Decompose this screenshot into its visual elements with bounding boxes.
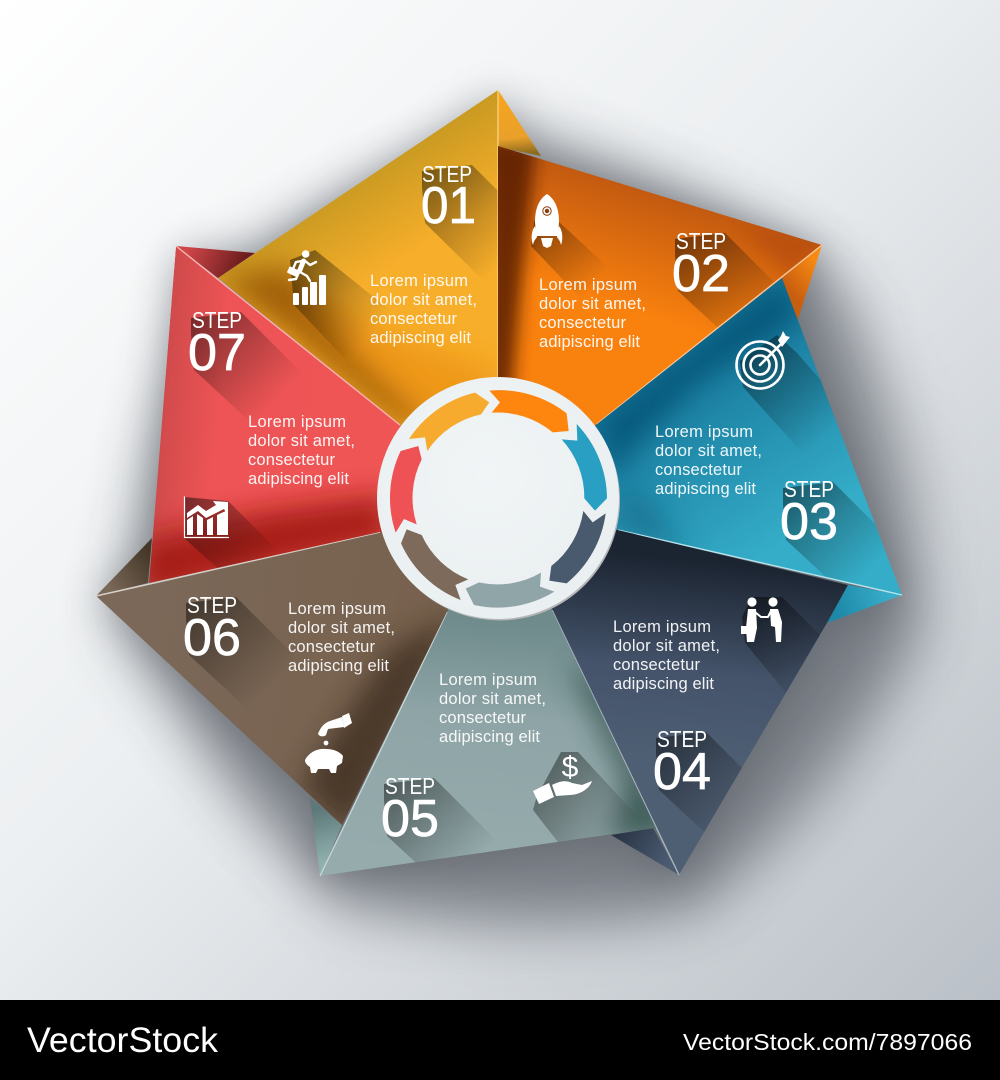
panel 05 fill	[322, 609, 656, 876]
icon: hand with dollar: $	[562, 751, 579, 784]
step 02 text: Lorem ipsum	[539, 276, 637, 294]
step 03 label: 03	[780, 493, 838, 551]
panel 06 edge	[96, 532, 380, 596]
icon: handshake	[741, 597, 782, 642]
panel: step 06	[96, 532, 448, 825]
step 05 text: Lorem ipsum	[439, 671, 537, 689]
folded flaps behind panels	[96, 90, 902, 876]
panel 03 edge	[618, 530, 902, 595]
footer logo: VectorStock	[27, 1021, 219, 1060]
step 01 label: STEP	[422, 161, 472, 187]
panel 01 edge	[497, 90, 499, 378]
step 02 label: STEP	[676, 228, 726, 254]
panel 07 fill	[149, 246, 401, 583]
step 04 text: consectetur	[613, 656, 700, 674]
step 06 text: dolor sit amet,	[288, 619, 395, 637]
step 06 label: 06	[183, 609, 241, 667]
step 02 text	[539, 276, 646, 351]
panel 02 edge	[597, 245, 822, 424]
step 07 text: consectetur	[248, 451, 336, 469]
step 05 text: dolor sit amet,	[439, 690, 546, 708]
panel 02 fill	[498, 146, 822, 426]
step 01 text: dolor sit amet,	[370, 291, 477, 309]
step 04 text: dolor sit amet,	[613, 637, 720, 655]
icon: rocket	[532, 194, 562, 248]
icon: hand with dollar	[533, 751, 592, 804]
panel: step 05	[320, 609, 656, 876]
step 02 label: 02	[672, 245, 730, 303]
step 05 label: 05	[381, 790, 439, 848]
step 03 text: adipiscing elit	[655, 480, 756, 498]
footer url: VectorStock.com/7897066	[683, 1029, 972, 1055]
step 07 label: STEP	[192, 307, 242, 333]
panel: step 03	[595, 278, 902, 596]
step 01 text: consectetur	[370, 310, 458, 328]
step 03 text: Lorem ipsum	[655, 423, 753, 441]
panel: step 02	[498, 146, 822, 426]
panel 04 edge	[552, 610, 679, 875]
step 06 text: consectetur	[288, 638, 376, 656]
panel 03 fill	[595, 278, 902, 594]
step 06 label: STEP	[187, 592, 237, 618]
step 05 label: STEP	[385, 773, 435, 799]
icon: growth chart	[184, 497, 228, 538]
step 04 text	[613, 618, 720, 693]
step 04 text: Lorem ipsum	[613, 618, 711, 636]
step 06 text: Lorem ipsum	[288, 600, 386, 618]
step 06 text: adipiscing elit	[288, 657, 389, 675]
drop shadow beneath the pinwheel	[97, 94, 922, 930]
step 03 label: STEP	[784, 476, 834, 502]
panel: step 01	[218, 90, 499, 426]
step 02 text: adipiscing elit	[539, 333, 640, 351]
step 01 text: adipiscing elit	[370, 329, 471, 347]
icon: target with arrow	[736, 331, 790, 388]
panel: step 04	[552, 530, 848, 876]
step 01 label: 01	[421, 177, 476, 235]
panel 05 edge	[320, 612, 447, 876]
panel 04 fill	[552, 530, 848, 874]
panel 06 fill	[96, 532, 448, 825]
step 03 text	[655, 423, 762, 498]
panel 01 fill	[218, 90, 498, 426]
footer bar	[0, 1000, 1000, 1080]
icon: runner on bars	[287, 250, 326, 305]
step 05 text: adipiscing elit	[439, 728, 540, 746]
step 01 text: Lorem ipsum	[370, 272, 468, 290]
step 03 text: consectetur	[655, 461, 742, 479]
step 05 text	[439, 671, 546, 746]
circular arrows	[390, 390, 607, 608]
step 07 label: 07	[188, 324, 246, 382]
panel 07 edge	[176, 246, 400, 425]
step 06 text	[288, 600, 395, 675]
panel: step 07	[149, 246, 401, 583]
icon: hand and piggy bank	[305, 713, 352, 773]
step 04 text: adipiscing elit	[613, 675, 714, 693]
step 05 text: consectetur	[439, 709, 526, 727]
step 07 text: adipiscing elit	[248, 470, 349, 488]
step 03 text: dolor sit amet,	[655, 442, 762, 460]
step 02 text: consectetur	[539, 314, 626, 332]
step 07 text: dolor sit amet,	[248, 432, 355, 450]
step 04 label: STEP	[657, 726, 707, 752]
step 02 text: dolor sit amet,	[539, 295, 646, 313]
step 01 text	[370, 272, 477, 347]
step 07 text	[248, 413, 355, 488]
step 04 label: 04	[653, 743, 711, 801]
central ring with arrows	[377, 377, 620, 620]
step 07 text: Lorem ipsum	[248, 413, 346, 431]
